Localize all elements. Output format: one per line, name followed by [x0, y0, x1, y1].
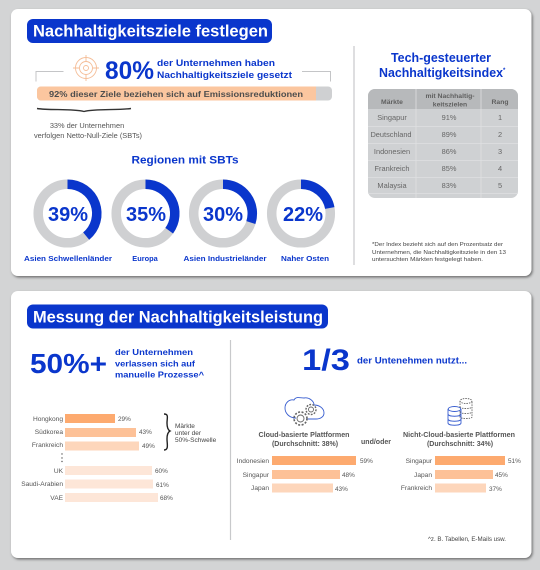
- brace: [37, 108, 131, 112]
- panel: Nachhaltigkeitsziele festlegen: [11, 9, 532, 276]
- bar chart: non-cloud platforms: [401, 456, 521, 493]
- donut: Naher Osten: Naher Osten: [281, 254, 330, 263]
- bar chart: manual processes: Saudi-Arabien: [21, 481, 63, 488]
- table: index ranking: 86%: [442, 147, 457, 156]
- donut: Naher Osten: 22%: [283, 204, 323, 226]
- table: index ranking: Märkte: [381, 99, 403, 106]
- donut: Asien Schwellenländer: 39%: [48, 204, 88, 226]
- bar chart: manual processes: 43%: [139, 429, 152, 436]
- table: index ranking: [368, 89, 518, 198]
- table: index ranking: 2: [498, 130, 502, 139]
- stat: one third: 1/3: [302, 344, 350, 377]
- stat: one third: der Untenehmen nutzt...: [357, 356, 467, 366]
- bar chart: cloud platforms: [237, 456, 373, 493]
- heading: Nachhaltigkeitsziele festlegen: Nachhaltigkeitsziele festlegen: [33, 22, 268, 40]
- bar chart: non-cloud platforms: Singapur: [406, 458, 433, 465]
- bar chart: non-cloud platforms: 45%: [495, 472, 508, 479]
- bar: 92 percent: [37, 86, 332, 100]
- bar chart: cloud platforms: Singapur: [243, 472, 270, 479]
- text: 33 percent: 33% der Unternehmen: [50, 121, 124, 130]
- stat: 80 percent: 80%: [105, 57, 154, 85]
- footnote: examples: ^z. B. Tabellen, E-Mails usw.: [428, 536, 506, 543]
- panel: Messung der Nachhaltigkeitsleistung: [11, 291, 532, 558]
- bar chart: manual processes: VAE: [50, 495, 64, 502]
- heading: Tech-gesteuerter Nachhaltigkeitsindex: [379, 51, 506, 80]
- heading: Tech-gesteuerter Nachhaltigkeitsindex: Nachhaltigkeitsindex: [379, 66, 503, 80]
- bar chart: manual processes: 61%: [156, 482, 169, 489]
- stat: one third: [302, 344, 467, 377]
- footnote: index: untersuchten Märkten festgelegt haben.: [372, 257, 483, 263]
- divider: [230, 340, 232, 540]
- text: non-cloud platforms: (Durchschnitt: 34%): [427, 441, 493, 448]
- table: index ranking: keitszielen: [433, 102, 467, 108]
- donut: Asien Industrieländer: 30%: [203, 204, 243, 226]
- table: index ranking: 5: [498, 181, 502, 190]
- table: index ranking: Deutschland: [370, 130, 412, 139]
- bar chart: manual processes: 49%: [142, 443, 155, 450]
- text: cloud platforms: (Durchschnitt: 38%): [272, 441, 338, 448]
- text: cloud platforms: Cloud-basierte Plattformen: [258, 432, 350, 439]
- icon: cloud with gears: [285, 398, 324, 425]
- donut: Naher Osten: [272, 184, 330, 263]
- table: index ranking: Indonesien: [374, 147, 410, 156]
- brace: markets below threshold: [164, 414, 170, 450]
- bar chart: manual processes: Südkorea: [35, 429, 63, 436]
- heading: Regionen mit SBTs: Regionen mit SBTs: [132, 154, 238, 166]
- icon: target: [73, 55, 99, 81]
- stat: 50 percent plus: 50%+: [30, 348, 107, 379]
- text: cloud platforms: [258, 432, 350, 448]
- table: index ranking: Malaysia: [377, 181, 407, 190]
- table: index ranking: Singapur: [377, 113, 407, 122]
- table: index ranking: 91%: [442, 113, 457, 122]
- bar chart: non-cloud platforms: 51%: [508, 458, 521, 465]
- stat: 50 percent plus: der Unternehmen: [115, 347, 193, 357]
- table: index ranking: 3: [498, 147, 502, 156]
- table: index ranking: 89%: [442, 130, 457, 139]
- heading: Tech-gesteuerter Nachhaltigkeitsindex: *: [503, 68, 506, 74]
- text: 33 percent: verfolgen Netto-Null-Ziele (SBTs): [34, 131, 142, 140]
- bar chart: non-cloud platforms: 37%: [489, 486, 502, 493]
- bar chart: manual processes: Hongkong: [33, 416, 63, 423]
- donut: Asien Schwellenländer: Asien Schwellenländer: [24, 254, 112, 263]
- text: 33 percent: [34, 121, 142, 140]
- stat: 80 percent: Nachhaltigkeitsziele gesetzt: [157, 70, 292, 80]
- text: markets below threshold: 50%-Schwelle: [175, 437, 217, 444]
- text: markets below threshold: Märkte: [175, 423, 195, 430]
- heading: Messung der Nachhaltigkeitsleistung: Messung der Nachhaltigkeitsleistung: [33, 308, 323, 326]
- bar chart: manual processes: [21, 414, 173, 502]
- footnote: index: *Der Index bezieht sich auf den Prozentsatz der: [372, 242, 503, 248]
- table: index ranking: 83%: [442, 181, 457, 190]
- text: non-cloud platforms: [403, 432, 515, 448]
- heading: Tech-gesteuerter Nachhaltigkeitsindex: Tech-gesteuerter: [391, 51, 491, 65]
- bar chart: manual processes: 68%: [160, 495, 173, 502]
- stat: 80 percent: der Unternehmen haben: [157, 58, 275, 68]
- table: index ranking: 85%: [442, 164, 457, 173]
- donut: Europa: [116, 184, 175, 263]
- table: index ranking: Frankreich: [375, 164, 409, 173]
- divider: [353, 46, 355, 265]
- text: markets below threshold: [175, 423, 217, 444]
- donut: Asien Industrieländer: Asien Industrieländer: [184, 254, 267, 263]
- stat: 80 percent: [105, 57, 292, 85]
- bar chart: manual processes: 29%: [118, 416, 131, 423]
- stat: 50 percent plus: [30, 347, 204, 380]
- bar chart: manual processes: Frankreich: [32, 442, 63, 449]
- table: index ranking: 4: [498, 164, 502, 173]
- footnote: index: [372, 242, 506, 263]
- stat: 50 percent plus: manuelle Prozesse^: [115, 370, 204, 380]
- table: index ranking: Rang: [492, 99, 508, 106]
- bar chart: cloud platforms: 48%: [342, 472, 355, 479]
- text: non-cloud platforms: Nicht-Cloud-basierte Plattformen: [403, 432, 515, 439]
- donut: Europa: Europa: [132, 254, 159, 263]
- bar chart: manual processes: 60%: [155, 468, 168, 475]
- donut: Asien Schwellenländer: [24, 184, 112, 263]
- bar chart: cloud platforms: 43%: [335, 486, 348, 493]
- bar chart: cloud platforms: Japan: [251, 485, 269, 492]
- table: index ranking: mit Nachhaltig-: [425, 93, 475, 100]
- bar chart: non-cloud platforms: Frankreich: [401, 485, 432, 492]
- text: und/oder: und/oder: [361, 439, 391, 446]
- bar chart: cloud platforms: 59%: [360, 458, 373, 465]
- bar chart: manual processes: UK: [54, 468, 64, 475]
- bar chart: non-cloud platforms: Japan: [414, 472, 432, 479]
- bar chart: cloud platforms: Indonesien: [237, 458, 269, 465]
- bracket lines: [36, 72, 330, 82]
- footnote: index: Unternehmen, die Nachhaltigkeitsziele in den 13: [372, 250, 506, 256]
- donut: Europa: 35%: [126, 204, 166, 226]
- stat: 50 percent plus: verlassen sich auf: [115, 358, 195, 368]
- bar: 92 percent: 92% dieser Ziele beziehen sich auf Emissionsreduktionen: [49, 89, 303, 99]
- text: markets below threshold: unter der: [175, 430, 202, 437]
- icon: databases: [448, 398, 472, 425]
- table: index ranking: 1: [498, 113, 502, 122]
- donut: Asien Industrieländer: [184, 184, 267, 263]
